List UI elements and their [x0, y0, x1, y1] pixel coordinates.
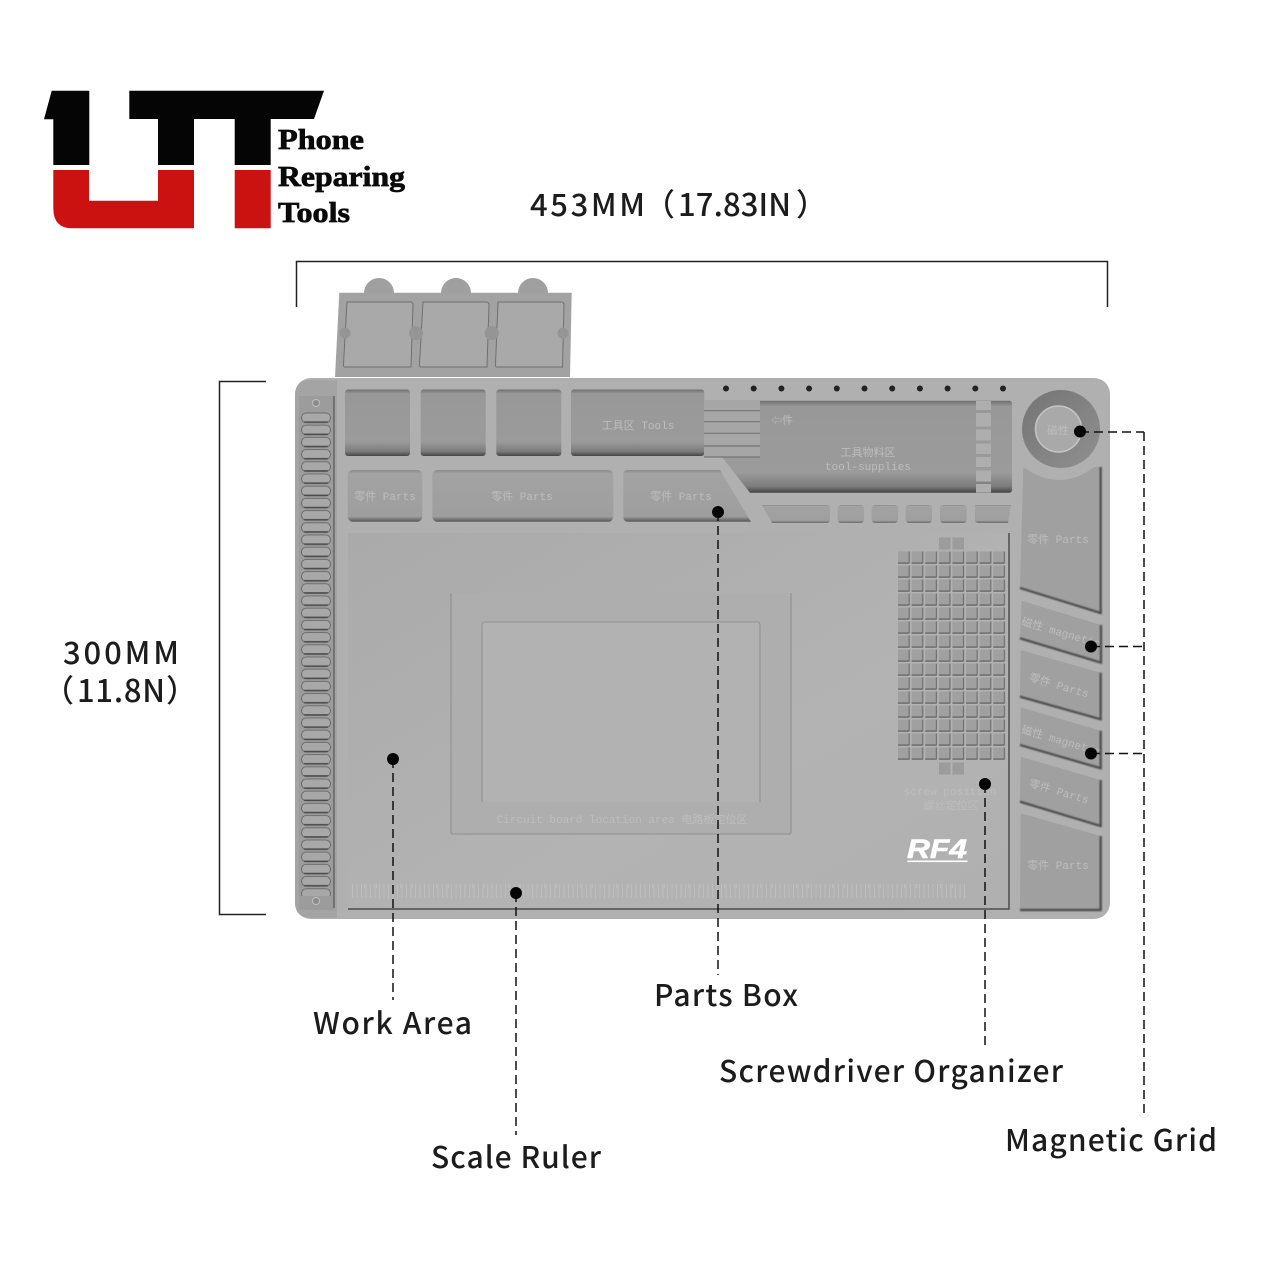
- marker: [387, 753, 399, 765]
- RF4 logo: RF4: [907, 834, 967, 864]
- dish centre: [1036, 406, 1082, 452]
- screw position label: [904, 787, 996, 813]
- right tray shadow edges: [1020, 467, 1101, 910]
- height bracket: [220, 382, 266, 914]
- strip ribs: [301, 412, 331, 896]
- logo text: Phone: [278, 124, 364, 156]
- top-row deep trays: [345, 390, 704, 456]
- label: Scale Ruler: [431, 1133, 602, 1177]
- supplies tray labels: [771, 414, 911, 474]
- width bracket: [296, 262, 1108, 307]
- marker: [979, 778, 991, 790]
- supplies tray labels: 工具物料区: [840, 445, 896, 460]
- height dimension label: 300MM: [63, 628, 179, 673]
- flap tabs: [364, 278, 548, 308]
- right column labels: 零件 Parts: [1027, 671, 1090, 701]
- width dimension label: 17.83IN: [678, 180, 791, 225]
- marker: [510, 887, 522, 899]
- leader: [392, 759, 394, 1000]
- flap plate: [335, 293, 572, 377]
- screw grid: [898, 538, 1007, 774]
- callout: scale ruler: [431, 887, 602, 1177]
- grid bottom extras: [939, 762, 964, 774]
- logo mark: red lower: [53, 170, 271, 228]
- parts row labels: 零件 Parts: [491, 490, 553, 504]
- height dimension label: 11.8N: [77, 666, 165, 711]
- right column labels: 零件 Parts: [1027, 859, 1089, 873]
- supplies tray labels: tool-supplies: [825, 462, 911, 474]
- grid top extras: [939, 538, 964, 550]
- mat: [295, 278, 1110, 919]
- right column trays: [1020, 467, 1101, 910]
- logo: [44, 91, 406, 229]
- large supplies tray: [704, 401, 1012, 493]
- logo text: [278, 124, 406, 229]
- flap trays: [343, 302, 564, 367]
- markers: [1074, 426, 1097, 760]
- striped tool rest: [704, 400, 760, 457]
- right column labels: 零件 Parts: [1027, 777, 1090, 807]
- panel: mat body: [295, 378, 1110, 919]
- right column labels: 零件 Parts: [1027, 533, 1089, 547]
- peg holes: [723, 386, 1006, 392]
- circuit board label: Circuit board location area 电路板定位区: [497, 812, 747, 827]
- height dimension label: [43, 628, 197, 711]
- circuit board location frame: [451, 593, 791, 834]
- leaders: [1080, 432, 1144, 1115]
- strip divider: [333, 396, 335, 908]
- label: Screwdriver Organizer: [719, 1047, 1064, 1091]
- logo text: Reparing: [278, 161, 406, 193]
- flap notches: [340, 326, 568, 340]
- strip base: [295, 380, 337, 918]
- label: Parts Box: [654, 971, 798, 1015]
- panel: work area: [348, 533, 1009, 909]
- right column labels: [1020, 533, 1102, 873]
- width dimension label: （: [644, 180, 675, 225]
- ladder divider: [976, 401, 991, 492]
- logo text: Tools: [278, 197, 350, 229]
- parts row labels: 零件 Parts: [650, 490, 712, 504]
- tools tray label: 工具区 Tools: [602, 419, 674, 433]
- supplies tray labels: ⇦件: [771, 414, 793, 428]
- panel: left ribbed strip: [295, 380, 337, 918]
- height dimension label: （: [43, 666, 74, 711]
- dish label: 磁性: [1047, 423, 1069, 438]
- callout: magnetic grid: [1005, 426, 1217, 1160]
- marker: [712, 506, 724, 518]
- leader: [984, 784, 986, 1045]
- small trays row: [762, 505, 1011, 523]
- magnetic dish: [1022, 390, 1100, 468]
- logo mark: black upper: [44, 91, 324, 165]
- parts row labels: 零件 Parts: [354, 490, 416, 504]
- callout: screwdriver organizer: [719, 778, 1064, 1091]
- grid squares: [898, 552, 1007, 762]
- strip recess: [299, 396, 334, 910]
- label: Work Area: [313, 999, 472, 1043]
- scale ruler: [352, 886, 968, 891]
- circuit board inner area: [482, 622, 760, 802]
- strip holes: [312, 400, 320, 904]
- width dimension label: ）: [796, 180, 827, 225]
- parts row labels: [354, 490, 712, 504]
- right column labels: 磁性 magnetic: [1020, 722, 1102, 759]
- screw position label: screw position: [904, 787, 996, 799]
- parts row trays: [348, 470, 751, 522]
- right column labels: 磁性 magnetic: [1020, 614, 1102, 651]
- callout: parts box: [654, 506, 798, 1015]
- work area edge: [348, 533, 1009, 909]
- leader: [717, 512, 719, 975]
- label: Magnetic Grid: [1005, 1116, 1217, 1160]
- height dimension label: ）: [166, 666, 197, 711]
- panel: flap with small trays: [335, 278, 572, 377]
- leader: [515, 893, 517, 1135]
- dish ring: [1022, 390, 1100, 468]
- screw position label: 螺丝定位区: [924, 798, 978, 813]
- callout: work area: [313, 753, 472, 1043]
- width dimension label: 453MM: [530, 180, 645, 225]
- work surface: [348, 533, 1009, 909]
